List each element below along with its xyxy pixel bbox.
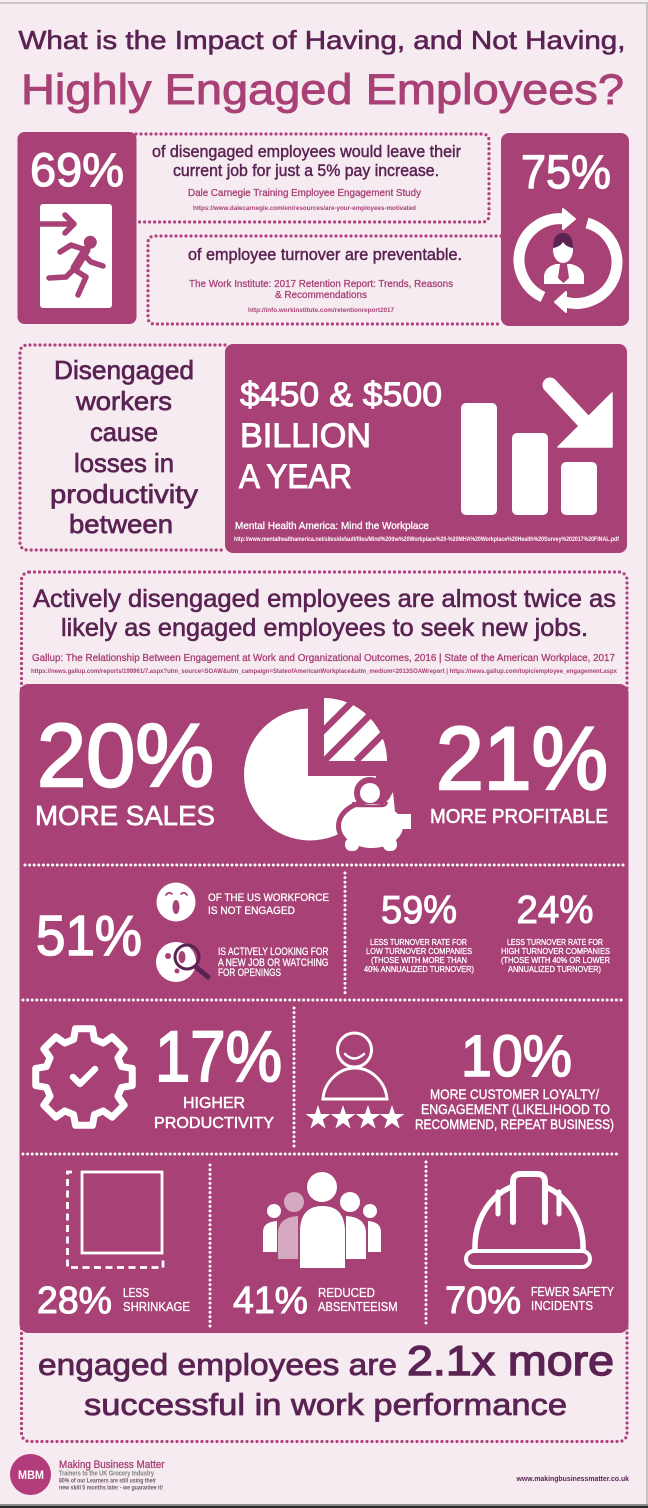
stat: 28 percent less shrinkage [37,1280,190,1322]
text block: disengaged workers: between [69,509,173,539]
icon: face with magnifying glass [156,942,208,982]
stat: 17 percent higher productivity: PRODUCTIVITY [154,1115,274,1132]
callout: 75 percent text box [148,236,501,324]
stat: 24 percent less turnover: ANNUALIZED TURNOVER) [508,964,601,974]
text block: 2.1x more successful: 2.1x more [407,1337,614,1384]
logo: Making Business Matter: Making Business Matter [59,1459,165,1471]
panel: actively disengaged heading: Gallup: The Relationship Between Engagement at Work and Organizational Outcomes, 2016 | State of the American Workplace, 2017 [32,652,615,664]
icon: gear with check mark [36,1029,132,1125]
icon: hard hat [466,1174,590,1267]
icon: smiling customer with stars [306,1033,404,1128]
text block: 2.1x more successful: engaged employees are [38,1347,397,1382]
text block: disengaged workers: productivity [50,479,198,509]
text block: disengaged workers: workers [75,386,172,416]
stat: 10 percent customer loyalty: MORE CUSTOMER LOYALTY/ [430,1086,599,1102]
stat: 28 percent less shrinkage: LESS [123,1285,149,1300]
panel: 450 and 500 billion [225,344,627,553]
callout: 69 percent text box: current job for just a 5% pay increase. [173,162,439,180]
text block: disengaged workers [20,345,225,550]
stat: 17 percent higher productivity [154,1018,282,1132]
icon: group of people [263,1172,381,1268]
callout: 75 percent text box: http://info.workinstitute.com/retentionreport2017 [248,307,394,314]
logo: Making Business Matter [10,1454,165,1495]
callout: 75 percent text box: of employee turnover are preventable. [188,246,462,264]
stat: 41 percent reduced absenteeism: ABSENTEEISM [318,1299,398,1314]
stat: 59 percent less turnover: LOW TURNOVER COMPANIES [366,946,472,956]
stat: 28 percent less shrinkage: 28% [37,1280,112,1322]
callout: 75 percent text box: The Work Institute: 2017 Retention Report: Trends, Reasons [189,278,453,290]
panel: 69 percent: 69% [30,143,124,196]
callout: 69 percent text box: of disengaged employees would leave their [152,143,461,161]
logo: Making Business Matter: Trainers to the UK Grocery Industry [59,1470,154,1478]
stat: 10 percent customer loyalty: ENGAGEMENT (LIKELIHOOD TO [421,1101,610,1117]
callout: 69 percent text box: Dale Carnegie Training Employee Engagement Study [188,187,422,199]
panel: actively disengaged heading: https://news.gallup.com/reports/199961/7.aspx?utm_source=SOAW&utm_campaign=StateofAmericanWorkplace&utm_medium=2013SOAWreport | https://news.gallup.com/topic/employee_engagement.aspx [31,669,618,675]
text block: disengaged workers: cause [90,417,158,447]
logo: Making Business Matter: MBM [18,1468,44,1482]
stat: 51 percent: IS ACTIVELY LOOKING FOR [218,946,329,958]
icon: shrinkage square [68,1172,163,1268]
text block: disengaged workers: losses in [74,448,174,478]
title [18,25,626,114]
stat: 51 percent: IS NOT ENGAGED [208,905,295,917]
callout: 69 percent text box [136,134,489,222]
stat: 21 percent more profitable: 21% [436,708,608,808]
stat: 10 percent customer loyalty: RECOMMEND, REPEAT BUSINESS) [415,1116,614,1132]
stat: 10 percent customer loyalty [415,1024,614,1132]
icon: exit sign with running person [40,204,112,308]
stat: 51 percent: FOR OPENINGS [218,967,281,979]
stat: 59 percent less turnover: 40% ANNUALIZED TURNOVER) [364,964,474,974]
panel: 450 and 500 billion: BILLION [240,417,371,455]
panel: engagement statistics [20,684,628,1333]
panel: 75 percent: 75% [521,145,611,198]
panel: actively disengaged heading [22,572,627,1442]
stat: 24 percent less turnover [501,889,610,974]
stat: 70 percent fewer safety incidents: 70% [445,1280,521,1322]
stat: 70 percent fewer safety incidents: FEWER SAFETY [531,1284,614,1299]
panel: 450 and 500 billion: Mental Health America: Mind the Workplace [235,520,429,532]
text block: 2.1x more successful [38,1337,614,1422]
stat: 41 percent reduced absenteeism [233,1280,398,1322]
stat: 59 percent less turnover: (THOSE WITH MORE THAN [371,955,467,965]
logo: Making Business Matter: 80% of our Learners are still using their [59,1478,157,1484]
stat: 10 percent customer loyalty: 10% [461,1024,572,1089]
panel: actively disengaged heading: likely as engaged employees to seek new jobs. [61,614,588,642]
stat: 20 percent more sales: 20% [37,705,214,805]
stat: 17 percent higher productivity: HIGHER [183,1095,245,1112]
stat: 24 percent less turnover: 24% [516,889,594,932]
stat: 70 percent fewer safety incidents [445,1280,614,1322]
panel: actively disengaged heading: Actively disengaged employees are almost twice as [33,585,616,613]
stat: 59 percent less turnover: 59% [381,889,457,932]
title: What is the Impact of Having, and Not Having, [18,25,626,55]
website address: www.makingbusinessmatter.co.uk [516,1474,630,1483]
stat: 51 percent: 51% [36,904,142,968]
panel: 450 and 500 billion: $450 & $500 [240,376,442,414]
stat: 24 percent less turnover: LESS TURNOVER RATE FOR [507,937,603,947]
icon: circular arrows around employee [519,209,617,312]
stat: 51 percent [36,892,329,979]
stat: 21 percent more profitable: MORE PROFITABLE [430,806,608,828]
logo: Making Business Matter: new skill 5 months later - we guarantee it! [59,1486,163,1492]
callout: 69 percent text box: https://www.dalecarnegie.com/en/resources/are-your-employees-motivated [193,205,416,212]
stat: 51 percent: A NEW JOB OR WATCHING [218,957,328,969]
callout: 75 percent text box: & Recommendations [275,289,367,301]
stat: 41 percent reduced absenteeism: 41% [233,1280,308,1322]
title: Highly Engaged Employees? [21,66,624,114]
stat: 24 percent less turnover: HIGH TURNOVER COMPANIES [501,946,610,956]
stat: 59 percent less turnover: LESS TURNOVER RATE FOR [370,937,467,947]
panel: 450 and 500 billion: A YEAR [239,458,352,496]
stat: 41 percent reduced absenteeism: REDUCED [318,1285,375,1300]
stat: 24 percent less turnover: (THOSE WITH 40% OR LOWER [501,955,610,965]
panel: 75 percent [501,133,629,326]
stat: 20 percent more sales: MORE SALES [35,800,215,831]
stat: 59 percent less turnover [364,889,474,974]
icon: declining bar chart [461,385,612,515]
stat: 28 percent less shrinkage: SHRINKAGE [123,1299,190,1314]
text block: disengaged workers: Disengaged [54,355,194,385]
icon: surprised face [156,882,196,922]
icon: pie chart with piggy bank [244,695,411,851]
stat: 70 percent fewer safety incidents: INCIDENTS [531,1298,593,1313]
stat: 17 percent higher productivity: 17% [155,1018,282,1097]
text block: 2.1x more successful: successful in work performance [84,1387,567,1422]
stat: 51 percent: OF THE US WORKFORCE [208,892,329,904]
panel: 69 percent [18,132,136,324]
